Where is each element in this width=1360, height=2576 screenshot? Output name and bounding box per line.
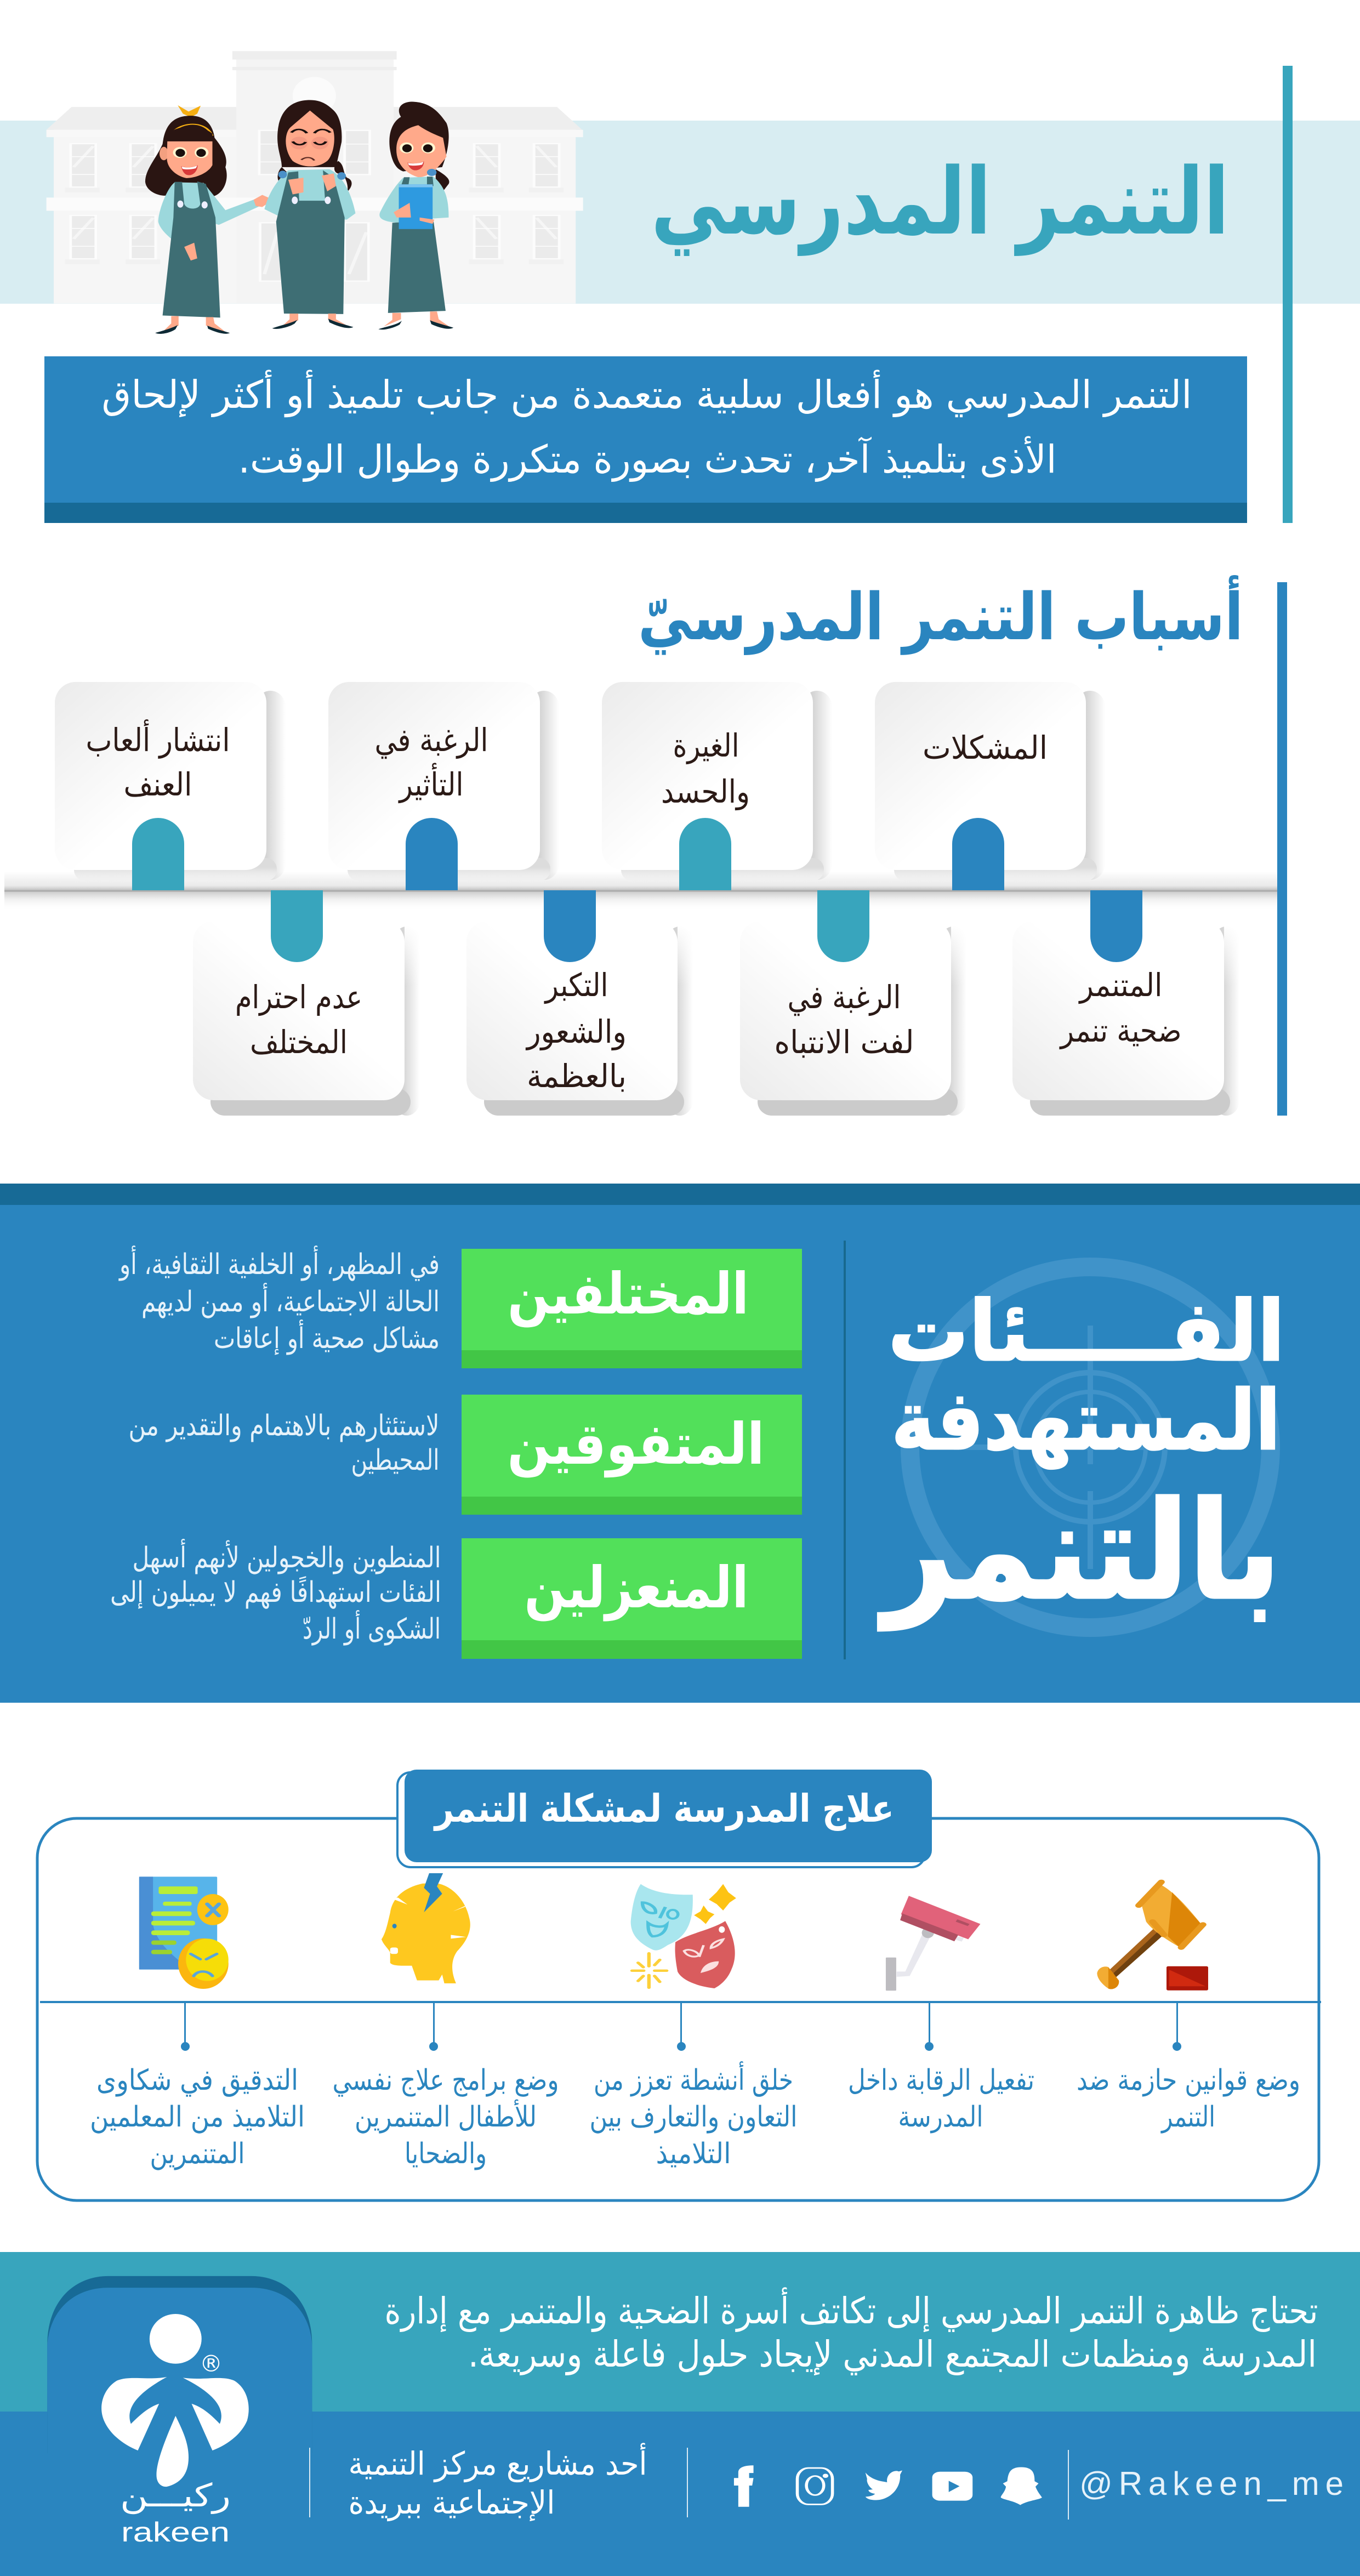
group: the isolated: الفئات استهدافًا فهم لا يميلون إلى: [110, 1576, 441, 1609]
timeline bar: [4, 872, 1277, 911]
label heading: علاج المدرسة لمشكلة التنمر: [433, 1786, 894, 1831]
text: psychological treatment: [332, 2064, 559, 2170]
card: spread of violent games: [55, 682, 266, 870]
footer: blue band: [0, 2412, 1360, 2576]
icon: gavel: [1097, 1882, 1208, 1991]
footer dividers: [309, 2448, 1069, 2520]
girl holding book: [378, 102, 453, 329]
icon: youtube: [932, 2472, 972, 2501]
header band: [0, 121, 1360, 304]
panel: target groups: [0, 1184, 1360, 1703]
girl pointing: [145, 105, 273, 334]
icon: snapchat: [1001, 2467, 1042, 2505]
group: the different: المختلفين: [508, 1260, 749, 1327]
group: the different: الحالة الاجتماعية، أو ممن لديهم: [141, 1283, 440, 1318]
text: activities: [590, 2061, 797, 2170]
card: jealousy: الغيرة: [673, 727, 739, 765]
definition box: الأذى بتلميذ آخر، تحدث بصورة متكررة وطوال الوقت.: [238, 436, 1057, 482]
card: spread of violent games: العنف: [124, 766, 192, 803]
logo tab: [47, 2276, 312, 2561]
icon: theatre masks: [631, 1884, 736, 1988]
card: desire to influence: التأثير: [398, 763, 464, 804]
group: high achievers: [128, 1395, 802, 1515]
icon: head with lightning: [382, 1873, 470, 1983]
card: jealousy: [602, 682, 813, 870]
text: strict laws: التنمر: [1160, 2101, 1215, 2134]
pills: [132, 818, 1142, 962]
card: attention seeking: [740, 921, 951, 1100]
group: the different: [118, 1246, 802, 1368]
card: arrogance: التكبر: [544, 966, 608, 1004]
panel: school treatment: [37, 1770, 1321, 2200]
panel: causes timeline: [4, 682, 1277, 1116]
text: activate monitoring: المدرسة: [898, 2101, 983, 2134]
card: arrogance: والشعور: [525, 1013, 627, 1051]
target icon watermark: [910, 1267, 1271, 1628]
group: high achievers: المحيطين: [351, 1444, 440, 1477]
card: bully is a victim: ضحية تنمر: [1059, 1012, 1182, 1050]
card: arrogance: [466, 921, 678, 1100]
icon: facebook: [734, 2465, 754, 2507]
footer tagline: الإجتماعية ببريدة: [349, 2484, 555, 2522]
heading: targeted groups: [878, 1283, 1285, 1630]
red mask and stars: [675, 1884, 736, 1988]
group: the isolated: المنعزلين: [524, 1554, 749, 1621]
right accent bar: [1283, 66, 1293, 523]
footer: teal band: [0, 2252, 1360, 2412]
heading: targeted groups: بالتنمر: [878, 1473, 1281, 1630]
text: review complaints: المتنمرين: [150, 2137, 244, 2170]
card: disrespect of the different: المختلف: [250, 1023, 348, 1061]
school building illustration: [47, 51, 583, 304]
text: activities: التعاون والتعارف بين: [590, 2101, 797, 2134]
group: the isolated: [110, 1538, 802, 1659]
social icons: [734, 2465, 1042, 2507]
illustration: three schoolgirls: [145, 100, 453, 334]
text: psychological treatment: وضع برامج علاج نفسي: [332, 2064, 559, 2097]
text: strict laws: [1077, 2064, 1300, 2134]
card: desire to influence: [328, 682, 540, 870]
group: high achievers: لاستئثارهم بالاهتمام والتقدير من: [128, 1409, 440, 1442]
group: high achievers: المتفوقين: [508, 1411, 764, 1477]
treatment divider line: [40, 2001, 1321, 2003]
icon: instagram: [797, 2468, 833, 2504]
logo wordmark: [120, 2350, 231, 2547]
divider: [844, 1241, 846, 1659]
card: desire to influence: الرغبة في: [375, 721, 488, 759]
card: disrespect of the different: عدم احترام: [235, 979, 362, 1016]
icon: surveillance camera: [886, 1896, 980, 1991]
text: activities: التلاميذ: [656, 2137, 731, 2170]
connector stems: [181, 2002, 1181, 2051]
card shadows: [74, 691, 1240, 1116]
group: the different: مشاكل صحية أو إعاقات: [214, 1320, 440, 1355]
sad girl: [264, 100, 355, 329]
card: bully is a victim: [1012, 921, 1224, 1100]
text: review complaints: [90, 2064, 305, 2170]
label heading: [397, 1770, 932, 1867]
logo wordmark: ®: [200, 2350, 223, 2377]
group: the isolated: المنطوين والخجولين لأنهم أسهل: [133, 1539, 441, 1574]
text: psychological treatment: والضحايا: [405, 2137, 487, 2170]
text: review complaints: التدقيق في شكاوى: [96, 2064, 298, 2097]
logo wordmark: rakeen: [121, 2517, 230, 2547]
closing message: [385, 2287, 1318, 2375]
causes section bar: [1277, 582, 1287, 1116]
heading: targeted groups: الفـــــئات: [888, 1283, 1285, 1380]
definition box: التنمر المدرسي هو أفعال سلبية متعمدة من جانب تلميذ أو أكثر لإلحاق: [102, 369, 1192, 418]
logo mark: [101, 2314, 249, 2487]
icon: document with emoji: [139, 1876, 229, 1989]
text: strict laws: وضع قوانين حازمة ضد: [1077, 2064, 1300, 2097]
card: disrespect of the different: [193, 921, 405, 1100]
card: arrogance: بالعظمة: [527, 1057, 627, 1095]
heading: causes: أسباب التنمر المدرسيّ: [638, 575, 1243, 655]
heading: targeted groups: المستهدفة: [891, 1373, 1281, 1469]
card: spread of violent games: انتشار ألعاب: [86, 719, 230, 759]
footer tagline: أحد مشاريع مركز التنمية: [349, 2443, 647, 2483]
definition box: [44, 356, 1247, 523]
group: the isolated: الشكوى أو الردّ: [303, 1610, 441, 1646]
card: jealousy: والحسد: [661, 773, 750, 811]
card: attention seeking: الرغبة في: [787, 979, 901, 1016]
card: attention seeking: لفت الانتباه: [774, 1023, 914, 1061]
card: problems: [875, 682, 1086, 870]
text: review complaints: التلاميذ من المعلمين: [90, 2101, 305, 2134]
text: activate monitoring: تفعيل الرقابة داخل: [848, 2064, 1034, 2097]
card: bully is a victim: المتنمر: [1078, 966, 1162, 1004]
text: activities: خلق أنشطة تعزز من: [594, 2061, 793, 2097]
text: activate monitoring: [848, 2064, 1034, 2134]
blue mask: [631, 1884, 693, 1988]
text: psychological treatment: للأطفال المتنمرين: [355, 2099, 537, 2134]
logo wordmark: ركيـــن: [120, 2477, 231, 2515]
card: problems: المشكلات: [923, 729, 1048, 766]
group: the different: في المظهر، أو الخلفية الثقافية، أو: [118, 1246, 440, 1281]
social handle: @Rakeen_me: [1079, 2465, 1344, 2502]
footer tagline: [349, 2443, 647, 2522]
title: التنمر المدرسي: [651, 148, 1229, 256]
icon: twitter: [866, 2470, 902, 2500]
